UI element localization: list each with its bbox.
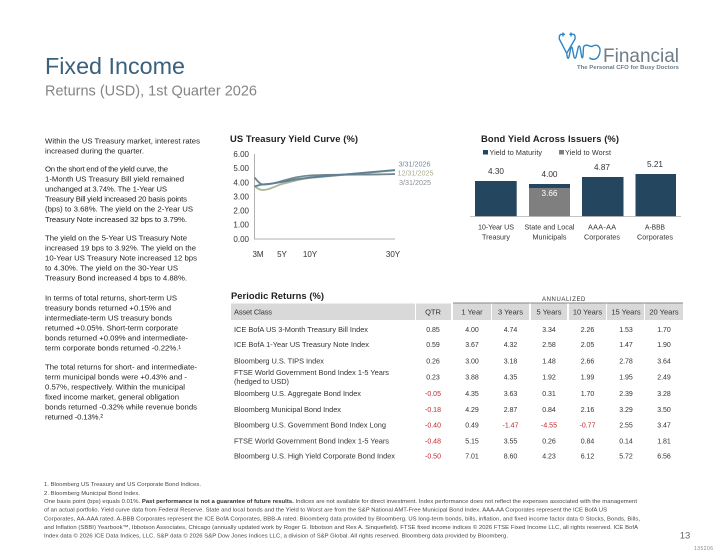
- row: 1-Year Note: 1.90: [657, 342, 671, 349]
- footnotes: Index data © 2026 ICE Data Indices, LLC. S&P data © 2026 S&P Dow Jones Indices LLC, a division of S&P Global. All rights reserved. Bloomberg data provided by Bloomberg.: [44, 532, 508, 540]
- chart heading: US Treasury Yield Curve (%): [230, 133, 358, 144]
- row: High Yield: 8.60: [504, 454, 517, 461]
- commentary text column: unchanged at 3.74%. The 1-Year US: [45, 184, 167, 194]
- row: FTSE hedged: 1.95: [619, 374, 633, 381]
- row: 1-Year Note: [234, 340, 671, 349]
- footnotes: One basis point (bps) equals 0.01%. Past performance is not a guarantee of future results. Indices are not available for direct investment. Index performance does not reflect the expenses associated with the management: [44, 499, 637, 505]
- row: Aggregate: Bloomberg U.S. Aggregate Bond Index: [234, 389, 361, 398]
- footnotes: 2. Bloomberg Municipal Bond Index.: [44, 491, 140, 497]
- row: FTSE 1-5: 5.15: [465, 438, 479, 445]
- row: Municipal: 2.16: [581, 407, 594, 414]
- footnotes: [44, 482, 640, 540]
- commentary text column: (bps) to 3.68%. The yield on the 2-Year US: [45, 204, 193, 214]
- logo tagline: The Personal CFO for Busy Doctors: [577, 65, 679, 71]
- row: Aggregate: 4.35: [465, 391, 479, 398]
- row: FTSE 1-5: 0.26: [542, 438, 556, 445]
- legend: [483, 148, 611, 157]
- row: High Yield: -0.50: [425, 454, 441, 461]
- line 12/31/2025: [254, 170, 395, 190]
- commentary text column: In terms of total returns, short-term US: [45, 294, 177, 302]
- y axis labels: 0.00: [233, 235, 250, 244]
- page number: 13: [680, 530, 690, 542]
- y axis labels: 2.00: [233, 206, 250, 216]
- row: 1-Year Note: ICE BofA 1-Year US Treasury Note Index: [234, 340, 369, 349]
- row: 3-Month T-Bill: [234, 325, 671, 334]
- x axis labels: 3M: [252, 250, 264, 259]
- row: 1-Year Note: 4.32: [504, 342, 517, 349]
- row: Government Long: Bloomberg U.S. Government Bond Index Long: [234, 420, 386, 429]
- series labels: 3/31/2026: [398, 160, 430, 168]
- y axis labels: [233, 150, 250, 244]
- y axis labels: 6.00: [233, 150, 250, 159]
- commentary text column: treasury bonds returned +0.15% and: [45, 304, 171, 312]
- value labels: 4.30: [488, 167, 504, 176]
- row: High Yield: Bloomberg U.S. High Yield Corporate Bond Index: [234, 452, 395, 461]
- row: Aggregate: 3.63: [504, 391, 517, 398]
- commentary text column: increased during the quarter.: [45, 146, 144, 156]
- row: High Yield: [234, 452, 671, 461]
- commentary text column: Treasury Note increased 32 bps to 3.79%.: [45, 215, 187, 224]
- row: TIPS: [234, 356, 671, 365]
- row: 3-Month T-Bill: 1.70: [657, 327, 671, 334]
- row: 3-Month T-Bill: 3.34: [542, 327, 556, 334]
- subtitle: Returns (USD), 1st Quarter 2026: [45, 84, 257, 100]
- commentary text column: 0.57%, respectively. Within the municipal: [45, 382, 185, 392]
- header row: 10 Years: [573, 308, 602, 316]
- row: 1-Year Note: 1.47: [619, 342, 633, 349]
- y axis labels: 3.00: [233, 192, 250, 202]
- category labels: 10-Year US: [478, 222, 514, 232]
- commentary text column: Treasury Bond increased 4 bps to 4.88%.: [45, 274, 187, 282]
- footnotes: Corporates, AA-AAA rated. A-BBB Corporates represent the ICE BofA Corporates, BBB-A rated. Bloomberg data provided by Bloomberg. US long-term bonds, bills, inflation, and fixed income factor data © Stocks, Bonds, Bills,: [44, 516, 640, 522]
- row: TIPS: 0.26: [426, 358, 440, 365]
- commentary text column: bonds returned -0.32% while revenue bonds: [45, 402, 197, 412]
- value labels: [488, 160, 663, 198]
- row: FTSE 1-5: [234, 436, 671, 445]
- commentary text column: Within the US Treasury market, interest rates: [45, 136, 200, 146]
- commentary text column: term corporate bonds returned -0.22%.¹: [45, 344, 181, 352]
- value labels: 4.87: [594, 163, 610, 172]
- row: FTSE 1-5: -0.48: [425, 438, 441, 445]
- x axis labels: [252, 250, 401, 259]
- commentary text column: 10-Year US Treasury Note increased 12 bps: [45, 254, 197, 262]
- row: Municipal: 4.29: [465, 407, 479, 414]
- logo: YMD Financial: [559, 32, 679, 71]
- row: Aggregate: 1.70: [581, 391, 594, 398]
- logo wordmark: Financial: [603, 45, 679, 67]
- line 3/31/2026: [254, 170, 395, 186]
- commentary text column: returned -0.13%.²: [45, 412, 103, 422]
- series labels: [398, 160, 433, 187]
- header row: Asset Class: [234, 308, 272, 316]
- category labels: Corporates: [637, 232, 673, 242]
- category labels: Treasury: [482, 232, 510, 242]
- category labels: [478, 222, 673, 242]
- category labels: AAA-AA: [588, 222, 616, 232]
- row: FTSE hedged: 2.49: [657, 374, 671, 381]
- commentary text column: [45, 136, 200, 422]
- y axis labels: 4.00: [233, 178, 250, 187]
- row: 1-Year Note: 3.67: [465, 342, 479, 349]
- category labels: A-BBB: [645, 222, 665, 232]
- commentary text column: bonds returned +0.09% and intermediate-: [45, 334, 188, 342]
- row: Government Long: -1.47: [503, 422, 519, 429]
- row: FTSE 1-5: FTSE World Government Bond Index 1-5 Years: [234, 436, 389, 445]
- row: 1-Year Note: 2.05: [581, 342, 594, 349]
- header row: 20 Years: [649, 308, 679, 316]
- row: Aggregate: 0.31: [542, 391, 556, 398]
- title: Fixed Income: [45, 53, 185, 79]
- row: Municipal: Bloomberg Municipal Bond Index: [234, 405, 341, 414]
- legend: Yield to Maturity: [490, 148, 542, 157]
- series labels: 12/31/2025: [398, 168, 433, 178]
- row: TIPS: 2.66: [581, 358, 594, 365]
- row: Municipal: 3.50: [657, 407, 671, 414]
- x axis labels: 30Y: [386, 250, 401, 259]
- row: 1-Year Note: 0.59: [426, 342, 440, 349]
- value labels: 4.00: [542, 170, 558, 179]
- table heading: Periodic Returns (%): [231, 290, 324, 301]
- row: Aggregate: 2.39: [619, 391, 633, 398]
- row: TIPS: 2.78: [619, 358, 633, 365]
- row: 3-Month T-Bill: 0.85: [426, 327, 440, 334]
- row: Government Long: 0.49: [465, 422, 479, 429]
- icon: stethoscope and tooth: [559, 32, 600, 59]
- commentary text column: returned +0.05%. Short-term corporate: [45, 324, 178, 332]
- annualized label: ANNUALIZED: [542, 297, 586, 303]
- row: Government Long: [234, 420, 671, 429]
- row: FTSE 1-5: 1.81: [657, 438, 671, 445]
- row: Government Long: -0.77: [580, 422, 596, 429]
- row: High Yield: 7.01: [465, 454, 479, 461]
- row: FTSE hedged: [234, 368, 671, 386]
- category labels: State and Local: [524, 222, 575, 232]
- row: FTSE 1-5: 0.84: [581, 438, 594, 445]
- row: Government Long: -0.40: [425, 422, 441, 429]
- header row: [231, 304, 683, 320]
- value labels: 5.21: [647, 160, 663, 169]
- row: Government Long: -4.55: [541, 422, 557, 429]
- row: Government Long: 2.55: [619, 422, 633, 429]
- footnotes: of an actual portfolio. Yield curve data from Federal Reserve. State and local bonds and the Yield to Worst are from the S&P National AMT-Free Municipal Bond Index. AAA-AA Corporates represent the ICE BofA US: [44, 508, 607, 514]
- row: Aggregate: 3.28: [657, 391, 671, 398]
- category labels: Municipals: [532, 232, 567, 242]
- row: TIPS: 1.48: [542, 358, 556, 365]
- header row: 15 Years: [611, 308, 641, 316]
- row: High Yield: 6.12: [581, 454, 594, 461]
- line 3/31/2025: [254, 174, 395, 184]
- row: FTSE hedged: 1.92: [542, 374, 556, 381]
- category labels: Corporates: [584, 232, 620, 242]
- row: 1-Year Note: 2.58: [542, 342, 556, 349]
- table: Periodic Returns: [231, 290, 683, 461]
- row: TIPS: 3.00: [465, 358, 479, 365]
- chart: US Treasury Yield Curve: [230, 133, 433, 259]
- commentary text column: intermediate-term US treasury bonds: [45, 314, 172, 322]
- commentary text column: to 4.30%. The yield on the 30-Year US: [45, 264, 178, 272]
- row: Municipal: -0.18: [425, 407, 441, 414]
- row: FTSE 1-5: 0.14: [619, 438, 633, 445]
- row: Aggregate: [234, 389, 671, 398]
- commentary text column: 1-Month US Treasury Bill yield remained: [45, 174, 184, 184]
- row: Municipal: 2.87: [504, 407, 517, 414]
- row: Municipal: 3.29: [619, 407, 633, 414]
- x axis labels: 5Y: [277, 250, 288, 259]
- bars: [475, 181, 517, 216]
- value labels: 3.66: [542, 189, 558, 198]
- row: TIPS: Bloomberg U.S. TIPS Index: [234, 356, 324, 365]
- chart heading: Bond Yield Across Issuers (%): [481, 133, 619, 144]
- row: FTSE hedged: 4.35: [504, 374, 517, 381]
- header row: 3 Years: [498, 308, 523, 316]
- row: 3-Month T-Bill: 4.00: [465, 327, 479, 334]
- commentary text column: term municipal bonds were +0.43% and -: [45, 372, 187, 382]
- series labels: 3/31/2025: [399, 178, 431, 187]
- commentary text column: fixed income market, general obligation: [45, 392, 179, 402]
- row: TIPS: 3.64: [657, 358, 671, 365]
- commentary text column: The total returns for short- and intermediate-: [45, 362, 197, 372]
- header row: QTR: [425, 308, 441, 316]
- row: FTSE hedged: 1.99: [581, 374, 594, 381]
- row: High Yield: 5.72: [619, 454, 633, 461]
- commentary text column: The yield on the 5-Year US Treasury Note: [45, 234, 187, 242]
- row: 3-Month T-Bill: 2.26: [581, 327, 594, 334]
- row: FTSE 1-5: 3.55: [504, 438, 517, 445]
- row: Government Long: 3.47: [657, 422, 671, 429]
- row: High Yield: 6.56: [657, 454, 671, 461]
- row: FTSE hedged: FTSE World Government Bond Index 1-5 Years: [234, 368, 389, 377]
- header row: 1 Year: [461, 308, 483, 316]
- commentary text column: Treasury Bill yield increased 20 basis points: [45, 194, 187, 204]
- y axis labels: 1.00: [233, 221, 250, 230]
- x axis labels: 10Y: [303, 250, 318, 259]
- header row: 5 Years: [536, 308, 562, 316]
- row: FTSE hedged: 3.88: [465, 374, 479, 381]
- commentary text column: On the short end of the yield curve, the: [45, 164, 168, 174]
- legend: Yield to Worst: [565, 148, 611, 157]
- row: High Yield: 4.23: [542, 454, 556, 461]
- row: FTSE hedged: 0.23: [426, 374, 440, 381]
- row: Municipal: 0.84: [542, 407, 556, 414]
- document code: 135206: [694, 546, 713, 552]
- chart: Bond Yield Across Issuers: [470, 133, 681, 242]
- footnotes: and Inflation (SBBI) Yearbook™, Ibbotson Associates, Chicago (annually updated work by Roger G. Ibbotson and Rex A. Sinquefield). FTSE fixed income indices © 2026 FTSE Fixed Income LLC, all rights reserved. ICE BofA: [44, 524, 638, 531]
- row: 3-Month T-Bill: 1.53: [619, 327, 633, 334]
- row: Aggregate: -0.05: [425, 391, 441, 398]
- row: FTSE hedged: (hedged to USD): [234, 377, 289, 386]
- commentary text column: increased 19 bps to 3.92%. The yield on the: [45, 244, 196, 252]
- footnotes: 1. Bloomberg US Treasury and US Corporate Bond Indices.: [44, 482, 201, 488]
- row: 3-Month T-Bill: ICE BofA US 3-Month Treasury Bill Index: [234, 325, 368, 334]
- row: TIPS: 3.18: [504, 358, 517, 365]
- row: 3-Month T-Bill: 4.74: [504, 327, 517, 334]
- y axis labels: 5.00: [233, 164, 250, 173]
- row: Municipal: [234, 405, 671, 414]
